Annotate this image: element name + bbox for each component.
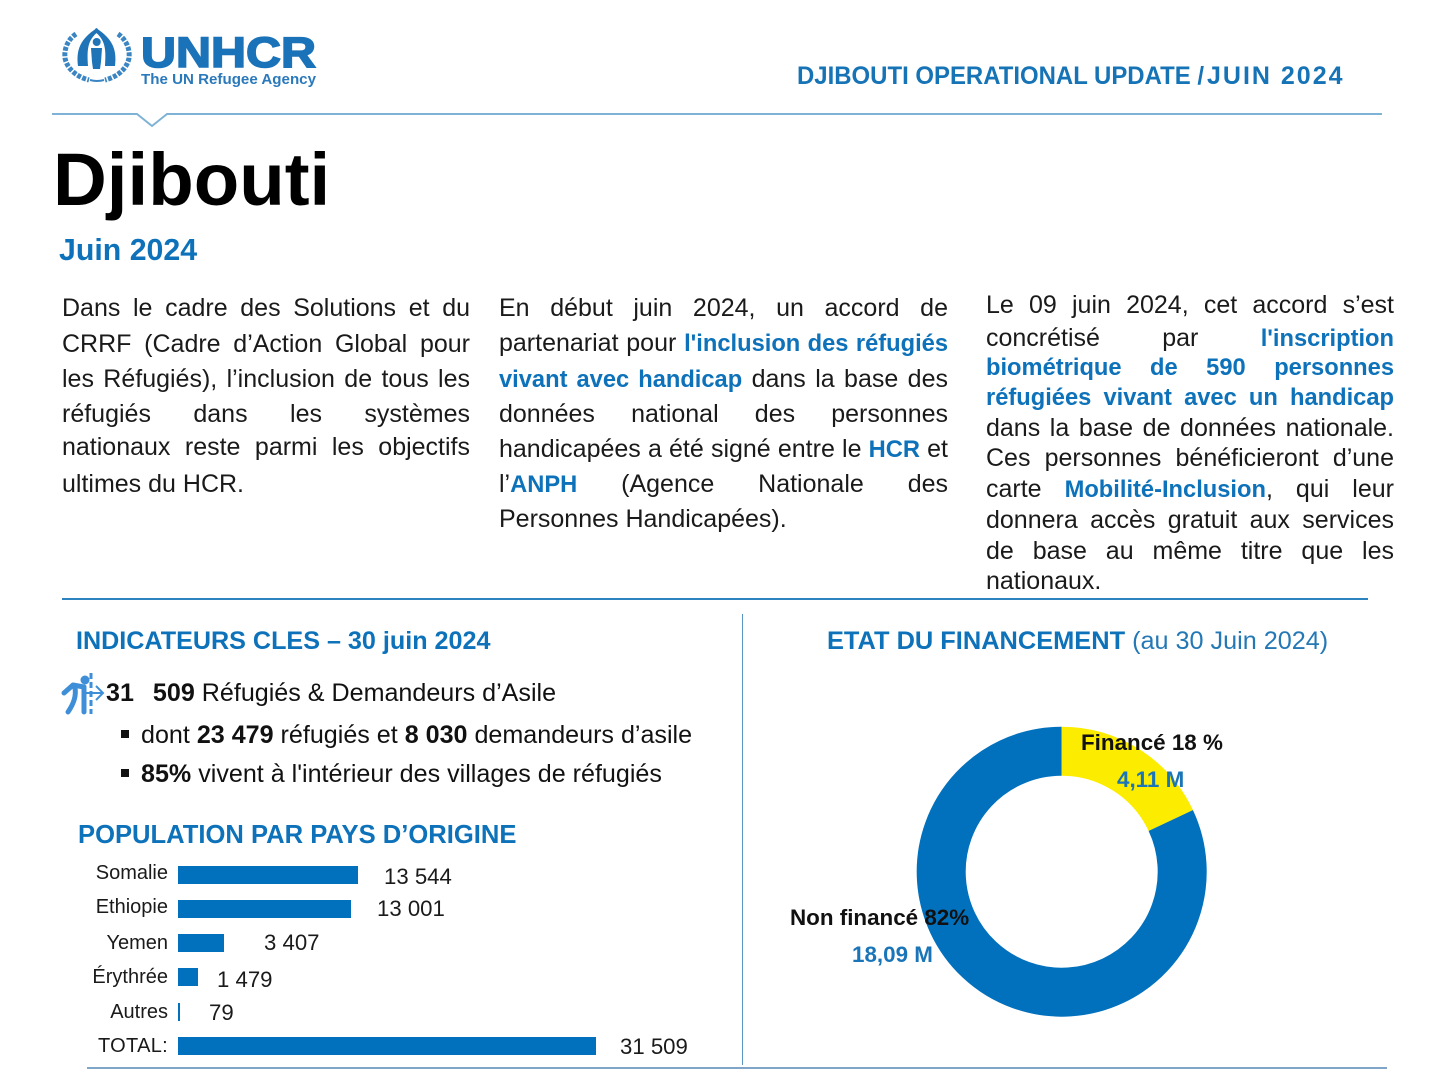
indicator: breakdown: dont 23 479 réfugiés et 8 030 demandeurs d’asile [141, 721, 692, 749]
text column 3: Ces personnes bénéficieront d’une [986, 444, 1394, 472]
footer rule [87, 1067, 1387, 1069]
text column 2: données national des personnes [499, 400, 948, 428]
text column 2 [499, 294, 948, 533]
tagline: The UN Refugee Agency [141, 71, 317, 88]
bar chart: population by country: 31 509 [620, 1034, 688, 1059]
value: funded: 4,11 M [1117, 767, 1184, 792]
text column 3: réfugiées vivant avec un handicap [986, 385, 1394, 411]
text column 3: carte Mobilité-Inclusion, qui leur [986, 475, 1394, 503]
logo: UNHCR [62, 28, 317, 88]
text column 2: partenariat pour l'inclusion des réfugiés [499, 329, 948, 357]
text column 3: Le 09 juin 2024, cet accord s’est [986, 291, 1394, 319]
icon: person crossing border [62, 673, 104, 714]
text column 1: nationaux reste parmi les objectifs [62, 433, 470, 461]
text column 3: donnera accès gratuit aux services [986, 506, 1394, 534]
heading: funding status: ETAT DU FINANCEMENT (au 30 Juin 2024) [827, 627, 1328, 655]
section divider [62, 598, 1368, 600]
text column 3 [986, 291, 1394, 595]
bar chart: population by country: 13 544 [384, 864, 452, 889]
header title part one: DJIBOUTI OPERATIONAL UPDATE / [797, 62, 1204, 90]
donut chart: funding [790, 726, 1223, 1017]
text column 1: les Réfugiés), l’inclusion de tous les [62, 365, 470, 393]
heading: key indicators: INDICATEURS CLES – 30 juin 2024 [76, 627, 490, 655]
page title: Djibouti [53, 138, 330, 221]
header rule with notch [52, 113, 1382, 128]
text column 2: En début juin 2024, un accord de [499, 294, 948, 322]
bar chart: population by country: Yemen [106, 932, 168, 954]
text column 1: réfugiés dans les systèmes [62, 400, 470, 428]
bullet marker [121, 769, 129, 777]
bar chart: population by country: Ethiopie [96, 896, 168, 918]
segment: funded 18% [941, 751, 1182, 992]
vertical divider [742, 614, 743, 1065]
bar chart: population by country: Érythrée [92, 966, 168, 988]
value: unfunded: 18,09 M [852, 942, 933, 967]
bar chart: population by country [92, 862, 688, 1059]
bar chart: population by country: TOTAL: [98, 1035, 168, 1057]
indicator: total population: 31 509 Réfugiés & Demandeurs d’Asile [106, 679, 556, 707]
bullet marker [121, 730, 129, 738]
text column 2: vivant avec handicap dans la base des [499, 365, 948, 393]
bar chart: population by country: 3 407 [264, 930, 320, 955]
text column 1: CRRF (Cadre d’Action Global pour [62, 330, 470, 358]
text column 3: dans la base de données nationale. [986, 414, 1394, 442]
text column 2: l’ANPH (Agence Nationale des [499, 470, 948, 498]
bar chart: population by country: 1 479 [217, 967, 273, 992]
segment: unfunded 82% [901, 711, 1222, 1032]
text column 1 [62, 294, 470, 498]
indicator: villages share: 85% vivent à l'intérieur des villages de réfugiés [141, 760, 662, 788]
text column 3: nationaux. [986, 567, 1101, 595]
text column 3: de base au même titre que les [986, 537, 1394, 565]
bar chart: population by country: Somalie [96, 862, 168, 884]
text column 1: ultimes du HCR. [62, 470, 244, 498]
text column 2: Personnes Handicapées). [499, 505, 787, 533]
emblem: hands sheltering person [65, 28, 129, 81]
header title [797, 62, 1345, 90]
date subtitle: Juin 2024 [59, 234, 197, 267]
header title part two: JUIN 2024 [1207, 62, 1345, 90]
text column 3: concrétisé par l'inscription [986, 324, 1394, 352]
wordmark: UNHCR [141, 29, 316, 77]
text column 1: Dans le cadre des Solutions et du [62, 294, 470, 322]
heading: population by origin: POPULATION PAR PAYS D’ORIGINE [78, 821, 516, 849]
bar chart: population by country: 13 001 [377, 896, 445, 921]
label: unfunded: Non financé 82% [790, 905, 969, 930]
label: funded: Financé 18 % [1081, 730, 1223, 755]
text column 2: handicapées a été signé entre le HCR et [499, 435, 948, 463]
bar chart: population by country: Autres [110, 1001, 168, 1023]
text column 3: biométrique de 590 personnes [986, 355, 1394, 381]
bar chart: population by country: 79 [209, 1000, 234, 1025]
